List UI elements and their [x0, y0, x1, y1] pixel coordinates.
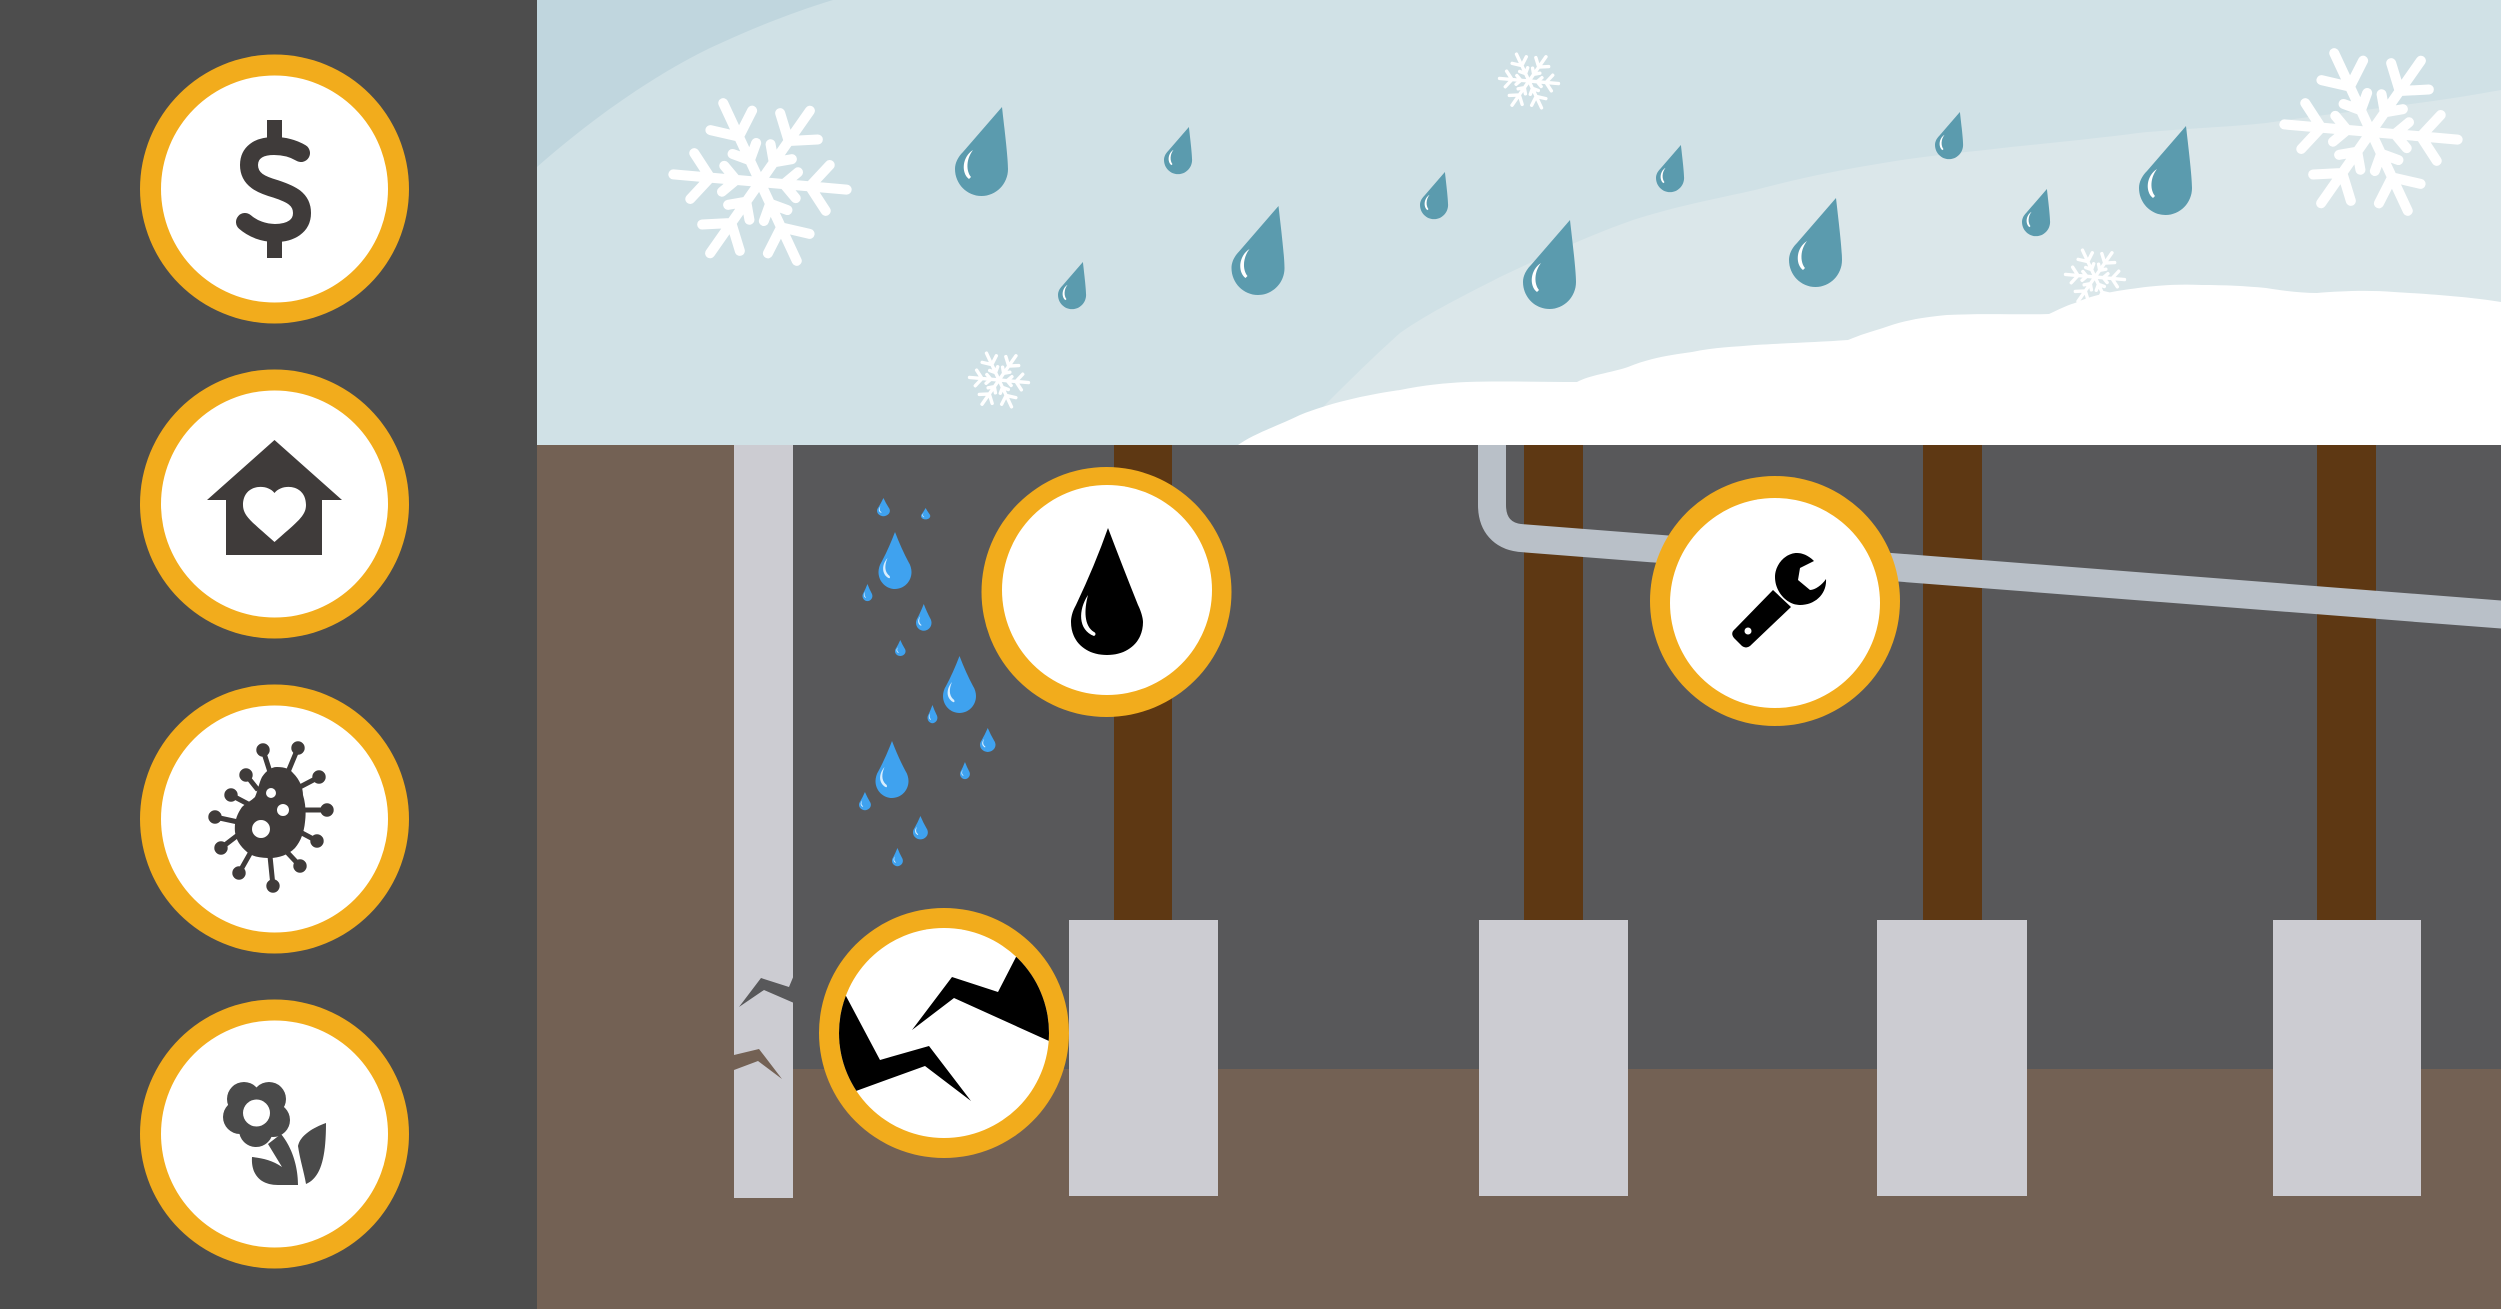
- wooden post 3: [1923, 445, 1982, 921]
- soil and crawlspace panel: [537, 445, 2501, 1309]
- snowflake: large left: [671, 93, 849, 271]
- snowflake: small top: [1499, 51, 1559, 111]
- snowflake: small behind snowdrift: [2065, 247, 2125, 307]
- wall crack lower: [734, 1049, 782, 1079]
- sagging pipe: [1492, 445, 2501, 616]
- concrete footing 2: [1479, 920, 1628, 1196]
- wooden post 4: [2317, 445, 2376, 921]
- snowdrift: [1238, 285, 2501, 446]
- leaking water droplets: [859, 498, 996, 866]
- badge: landscaping: [140, 1000, 409, 1268]
- badge: mold and germs: [140, 684, 409, 954]
- wall crack upper: [739, 975, 794, 1007]
- icon: crack: [839, 957, 1049, 1101]
- callout: foundation crack: [819, 908, 1069, 1158]
- crawlspace dark air gap: [793, 445, 2501, 1069]
- icon: black drop: [1071, 528, 1143, 655]
- sky: darker upper-left swoosh: [537, 0, 833, 167]
- sidebar panel: [0, 0, 537, 1309]
- drop highlight: [1081, 595, 1096, 636]
- badge: cost: [140, 54, 409, 324]
- concrete footing 1: [1069, 920, 1218, 1196]
- sky panel: [537, 0, 2501, 446]
- concrete foundation wall: [734, 445, 793, 1198]
- callout: oil drop: [982, 467, 1232, 717]
- wooden post 2: [1524, 445, 1583, 921]
- snowflake: large right: [2282, 43, 2460, 221]
- icon: flower: [223, 1082, 326, 1185]
- concrete footing 3: [1877, 920, 2027, 1196]
- icon: virus: [208, 741, 334, 893]
- snowflake: small lower: [969, 350, 1029, 410]
- icon: house with heart: [207, 440, 342, 555]
- icon: wrench: [1732, 553, 1826, 648]
- badge: home care: [140, 370, 409, 638]
- sky: lighter lower-right swoosh: [1320, 90, 2501, 446]
- concrete footing 4: [2273, 920, 2421, 1196]
- wooden post 1: [1114, 445, 1172, 921]
- callout: pipe wrench: [1650, 476, 1900, 726]
- icon: dollar sign: [245, 120, 302, 258]
- raindrops in sky: [955, 107, 2192, 309]
